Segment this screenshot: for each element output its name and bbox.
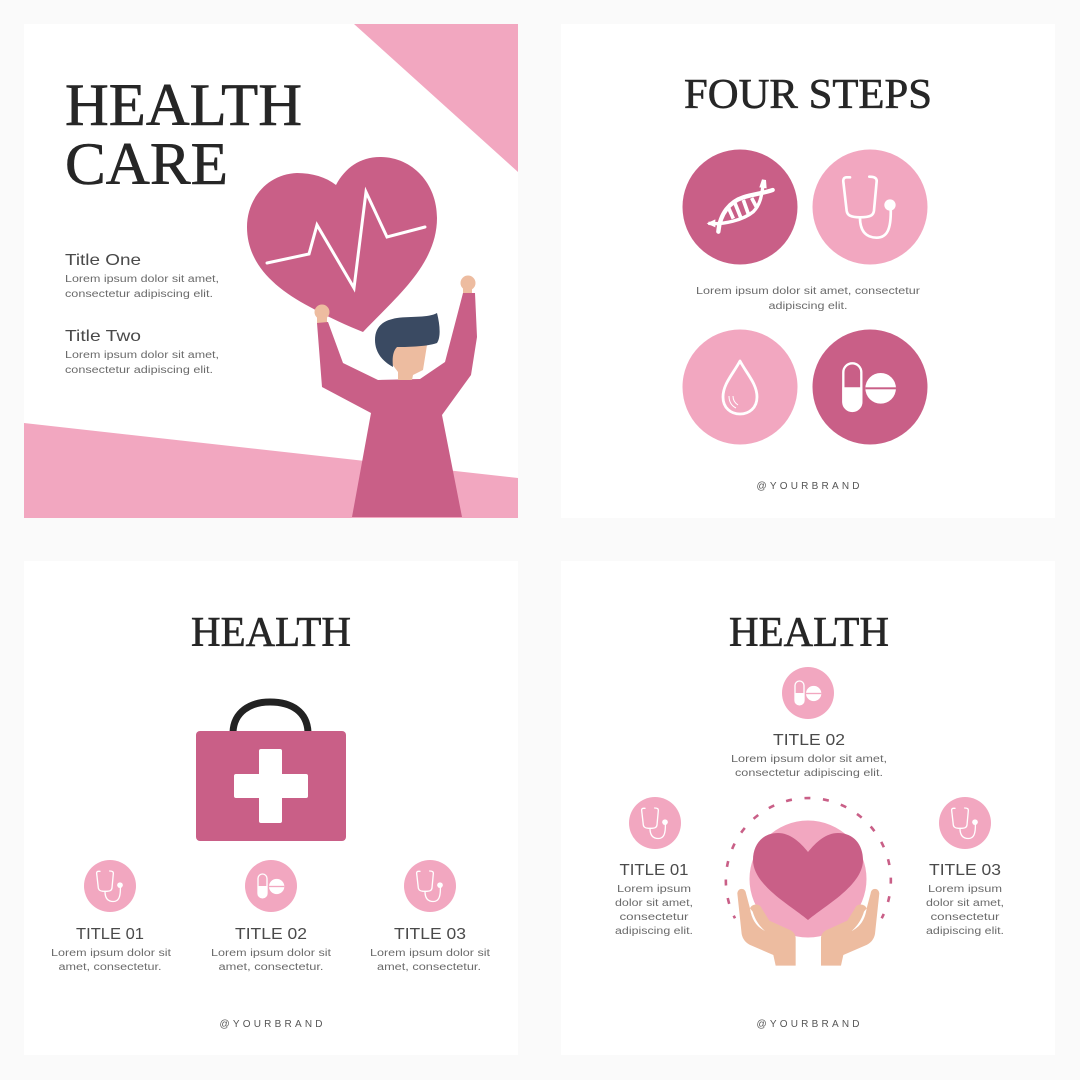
text block: title two: Title Two <box>65 328 141 345</box>
item: title 03 <box>370 860 490 973</box>
item: title 02: TITLE 02 <box>235 926 307 943</box>
heading: HEALTH <box>191 610 351 656</box>
item: title 03: consectetur <box>930 912 1000 923</box>
text block: title one: Lorem ipsum dolor sit amet, <box>65 274 219 285</box>
text block: title one <box>65 252 219 300</box>
text block: Lorem ipsum dolor sit amet, consectetur <box>696 286 921 297</box>
item: title 03 <box>926 797 1004 937</box>
title: CARE <box>65 131 228 197</box>
item: title 03: Lorem ipsum <box>928 884 1002 895</box>
text block: title two: consectetur adipiscing elit. <box>65 365 213 376</box>
item: title 03: TITLE 03 <box>394 926 466 943</box>
item: title 02: amet, consectetur. <box>218 962 324 973</box>
icon: medical kit <box>196 702 346 841</box>
text block <box>696 286 921 312</box>
icon: DNA <box>682 150 798 264</box>
figure: person raising arms <box>314 276 477 517</box>
title: HEALTH <box>65 72 302 138</box>
item: title 02: Lorem ipsum dolor sit amet, <box>731 754 887 765</box>
item: title 01: Lorem ipsum dolor sit <box>51 948 171 959</box>
brand handle: @YOURBRAND <box>220 1019 322 1030</box>
panel: health care cover <box>24 24 518 518</box>
item: title 01 <box>615 797 693 937</box>
item: title 01: TITLE 01 <box>620 862 689 879</box>
title <box>65 72 302 197</box>
item: title 01 <box>51 860 171 973</box>
decorative pink corner triangle <box>354 24 518 172</box>
icon: heart with pulse line <box>247 157 437 332</box>
icon: water drop <box>682 330 798 444</box>
item: title 01: adipiscing elit. <box>615 926 693 937</box>
heading: FOUR STEPS <box>684 72 932 118</box>
item: title 01: TITLE 01 <box>76 926 144 943</box>
text block: title one: Title One <box>65 252 141 269</box>
illustration: hands holding heart <box>726 798 891 966</box>
panel: health care hands <box>561 561 1055 1055</box>
heading: HEALTH <box>729 610 889 656</box>
item: title 03: amet, consectetur. <box>377 962 481 973</box>
item: title 02 <box>731 667 887 779</box>
pink ground shape <box>24 423 518 518</box>
item: title 03: TITLE 03 <box>929 862 1001 879</box>
item: title 02: Lorem ipsum dolor sit <box>211 948 331 959</box>
item: title 02: consectetur adipiscing elit. <box>735 768 883 779</box>
text block: adipiscing elit. <box>768 301 848 312</box>
item: title 02 <box>211 860 331 973</box>
brand handle: @YOURBRAND <box>756 481 860 492</box>
panel: four steps <box>561 24 1055 518</box>
item: title 03: dolor sit amet, <box>926 898 1004 909</box>
item: title 01: consectetur <box>620 912 689 923</box>
brand handle: @YOURBRAND <box>756 1019 860 1030</box>
icon: pills <box>812 330 928 444</box>
item: title 01: dolor sit amet, <box>615 898 693 909</box>
icon: stethoscope <box>812 150 928 264</box>
item: title 01: amet, consectetur. <box>58 962 162 973</box>
item: title 01: Lorem ipsum <box>617 884 691 895</box>
text block: title two: Lorem ipsum dolor sit amet, <box>65 350 219 361</box>
text block: title one: consectetur adipiscing elit. <box>65 289 213 300</box>
item: title 03: adipiscing elit. <box>926 926 1004 937</box>
text block: title two <box>65 328 219 376</box>
item: title 02: TITLE 02 <box>773 732 845 749</box>
item: title 03: Lorem ipsum dolor sit <box>370 948 490 959</box>
panel: health kit <box>24 561 518 1055</box>
